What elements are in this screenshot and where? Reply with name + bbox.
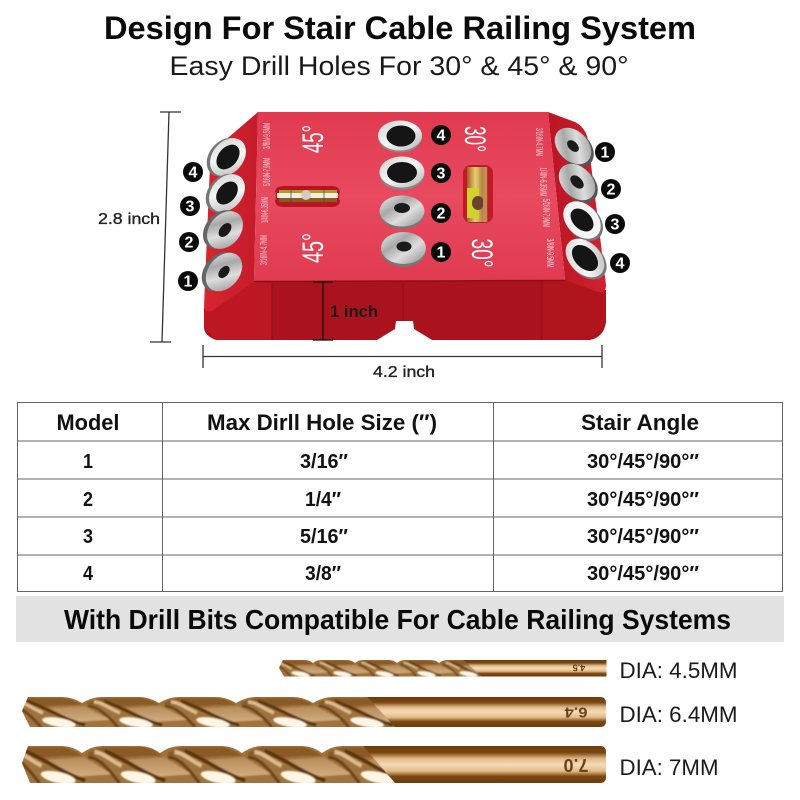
table rows: 3/8″	[305, 563, 341, 585]
table header: Max Dirll Hole Size (″)	[207, 410, 437, 435]
band heading: drill bits: With Drill Bits Compatible For Cable Railing Systems	[64, 604, 731, 635]
table header	[56, 410, 699, 435]
top face holes	[378, 120, 426, 267]
hole 3	[380, 156, 424, 190]
engraved size labels: 5/16IN-7.9MM	[540, 199, 551, 227]
engraved size labels: 1/4IN-6.35MM	[260, 197, 271, 223]
angle labels	[297, 125, 498, 268]
table header: Model	[56, 410, 120, 435]
numbered badges: 2	[607, 182, 616, 198]
drill bit 4.5mm: 4.5	[573, 662, 585, 672]
numbered badges: 2	[185, 234, 194, 252]
numbered badges: 4	[616, 256, 625, 272]
table rows: 1/4″	[305, 489, 341, 511]
table rows: 3/16″	[300, 451, 348, 473]
product: red drill jig block: 3/8IN-9.5MM	[262, 123, 273, 149]
table rows: 5/16″	[300, 526, 348, 548]
drill bit labels: DIA: 6.4MM	[620, 702, 738, 727]
drill bit 7.0mm	[22, 746, 606, 783]
numbered badges: 1	[437, 244, 446, 262]
left side holes	[194, 129, 253, 300]
right side holes	[547, 120, 614, 287]
numbered badges: 3	[186, 198, 195, 216]
engraved size labels: 1/4IN-6.35MM	[537, 168, 548, 196]
dimension: thickness 1 inch: 1 inch	[330, 303, 378, 321]
angle labels: 30°	[458, 126, 491, 152]
angle labels: 45°	[297, 233, 330, 263]
engraved size labels: 3/16IN-4.7MM	[533, 128, 544, 156]
dimension: height 2.8 inch: 2.8 inch	[98, 211, 160, 228]
engraved size labels: 3/16IN-4.7MM	[259, 235, 270, 265]
engraved size labels	[259, 123, 555, 268]
specification table	[17, 402, 783, 592]
table rows: 30°/45°/90°″	[587, 451, 699, 473]
band heading: drill bits	[16, 596, 784, 642]
numbered badges	[178, 125, 630, 291]
drill bit labels: DIA: 7MM	[620, 755, 718, 780]
table rows: 1	[83, 451, 93, 473]
table header: Stair Angle	[581, 410, 699, 435]
right bevel	[548, 112, 606, 292]
numbered badges: 2	[437, 206, 446, 222]
engraved size labels: 3/8IN-9.5MM	[544, 239, 555, 267]
drill bit 7.0mm: 7.0	[564, 755, 588, 775]
left bubble level	[275, 186, 340, 207]
top face	[254, 112, 565, 281]
drill bit labels	[620, 658, 738, 780]
table rows: 30°/45°/90°″	[587, 526, 699, 548]
product: red drill jig block	[178, 112, 630, 340]
drill bit 6.4mm: 6.4	[564, 704, 587, 720]
dimension: width 4.2 inch: 4.2 inch	[373, 364, 435, 381]
drill bit 6.4mm	[22, 697, 606, 727]
numbered badges: 3	[437, 166, 446, 182]
table rows: 4	[83, 563, 94, 585]
numbered badges: 4	[437, 128, 446, 144]
hole 4	[378, 120, 422, 152]
dimension: width 4.2 inch	[203, 345, 602, 381]
dimension: thickness 1 inch	[313, 282, 378, 340]
table rows: 30°/45°/90°″	[587, 489, 699, 511]
front face of block	[204, 280, 606, 340]
subtitle: Easy Drill Holes For 30° & 45° & 90°	[170, 51, 628, 81]
hole 2	[380, 196, 424, 229]
table rows: 30°/45°/90°″	[587, 563, 699, 585]
angle labels: 45°	[297, 125, 330, 153]
dimension: height 2.8 inch	[98, 112, 181, 342]
table rows: 2	[83, 489, 93, 511]
engraved size labels: 5/16IN-7.9MM	[262, 158, 273, 186]
left bevel	[204, 112, 258, 311]
numbered badges: 1	[601, 144, 610, 162]
drill bit 4.5mm	[279, 660, 606, 676]
drill bit labels: DIA: 4.5MM	[620, 658, 738, 683]
right bubble level	[463, 165, 493, 223]
table rows: 3	[83, 526, 93, 548]
numbered badges: 1	[184, 274, 193, 290]
angle labels: 30°	[465, 239, 498, 267]
title: Design For Stair Cable Railing System	[104, 10, 696, 46]
numbered badges: 3	[611, 216, 620, 234]
hole 1	[381, 232, 426, 267]
numbered badges: 4	[189, 164, 198, 182]
table rows	[83, 451, 699, 585]
